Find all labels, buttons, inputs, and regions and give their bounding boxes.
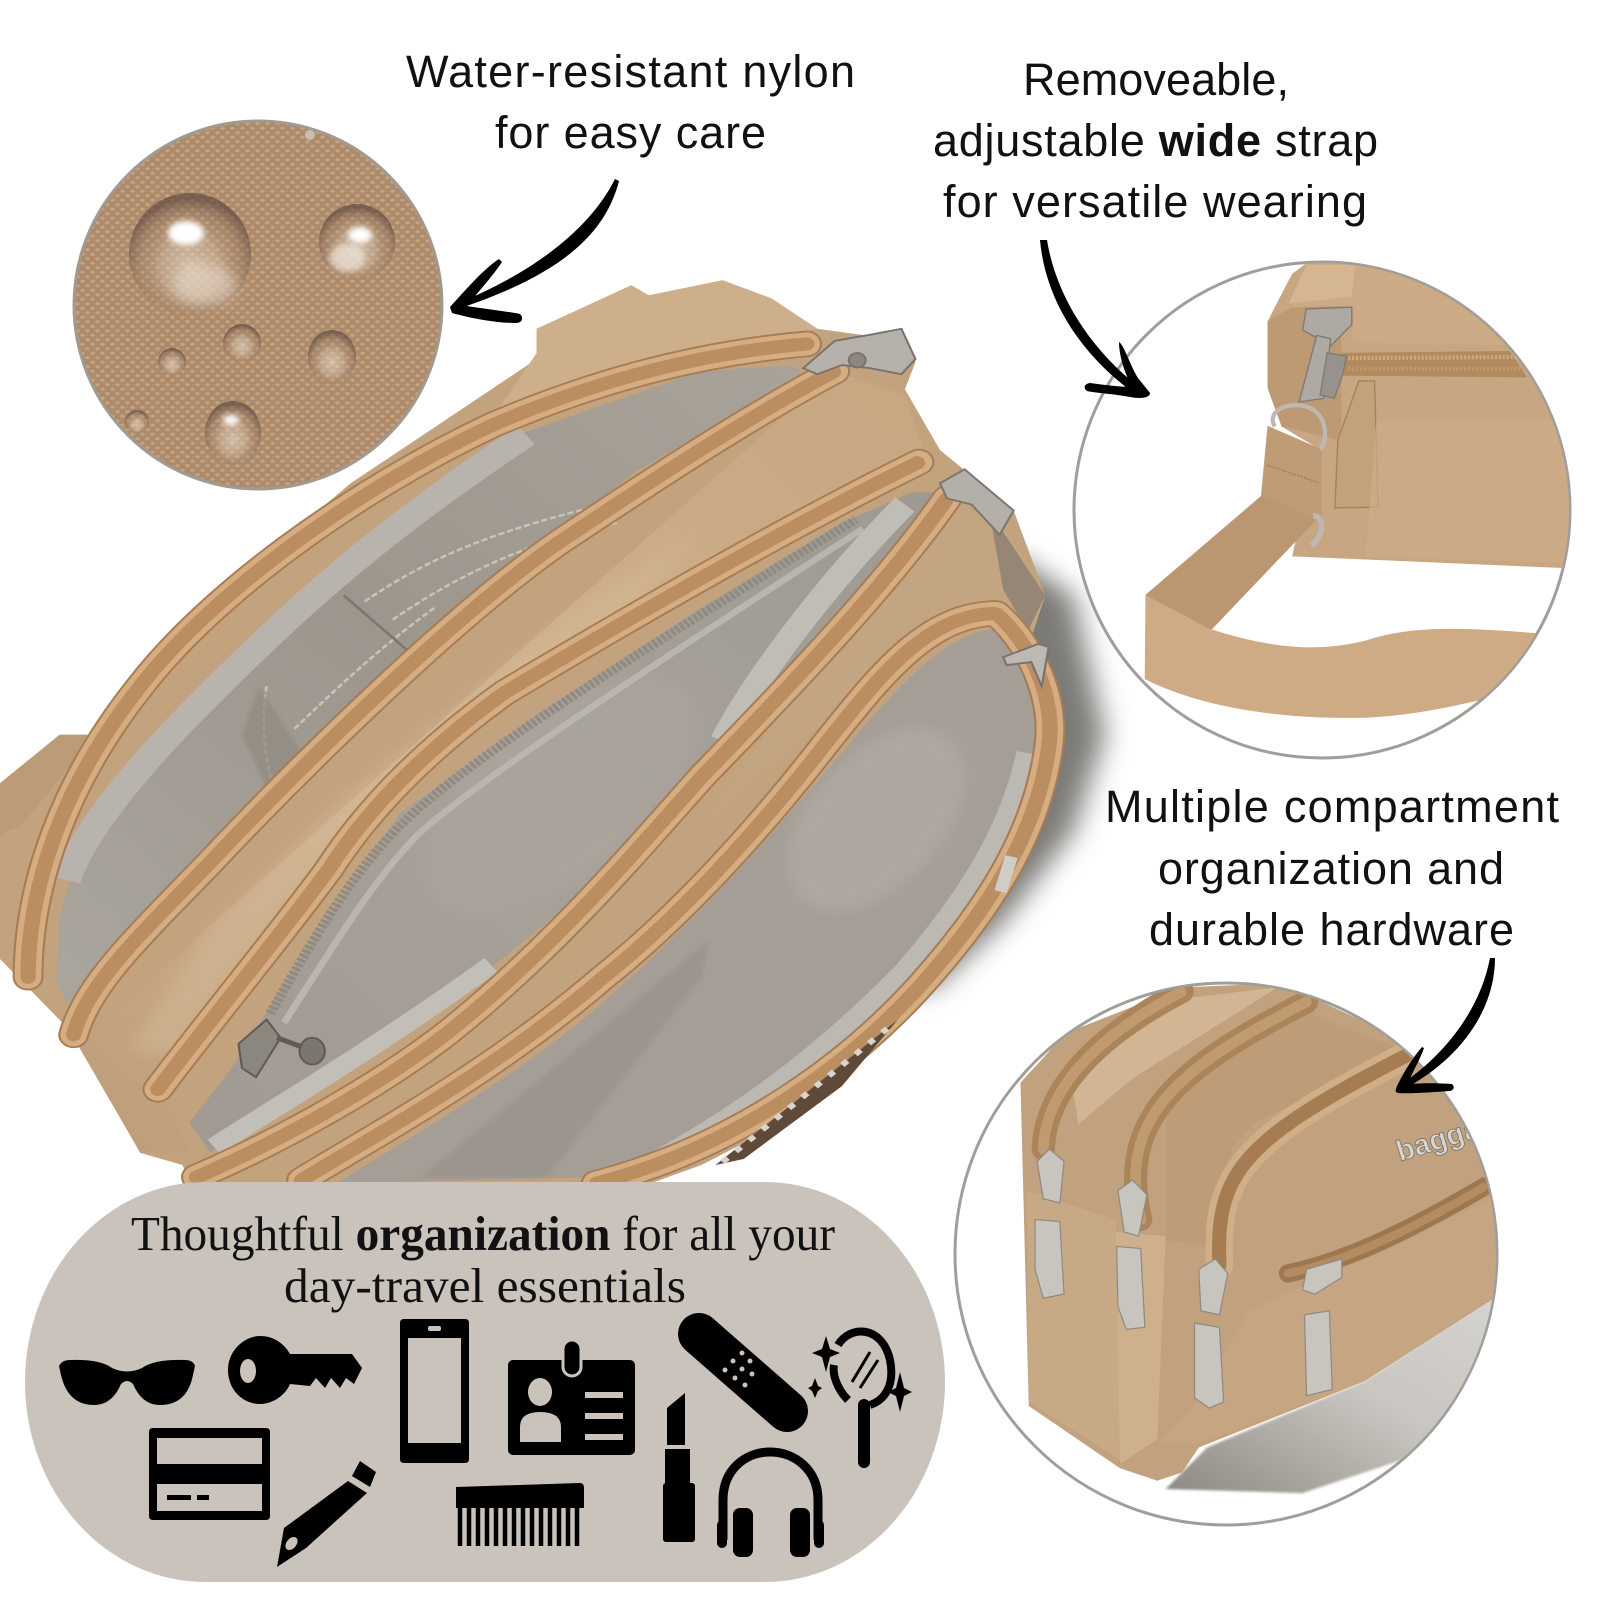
zipper pulls	[1035, 1149, 1342, 1408]
front interior fold	[421, 941, 709, 1177]
serif heading: Thoughtful organization for all your	[131, 1206, 835, 1261]
middle compartment interior	[189, 492, 940, 1153]
slider ring	[1311, 516, 1322, 546]
top strap tab	[491, 280, 817, 420]
fabric weave disc	[74, 121, 442, 489]
bag side	[1268, 263, 1576, 569]
lower zipper pull	[239, 1020, 325, 1077]
middle tan panel	[77, 371, 926, 1153]
middle interior grain highlight	[378, 637, 745, 954]
circle background	[1074, 262, 1570, 758]
arrow: to fabric closeup	[450, 179, 619, 323]
icon: lipstick	[663, 1393, 695, 1542]
icon: headphones	[717, 1452, 824, 1557]
text block: water-resistant nylon: Water-resistant nylon	[406, 46, 855, 97]
strap descending	[1145, 495, 1317, 634]
outer zipper	[28, 344, 807, 977]
circle background	[955, 983, 1497, 1525]
text block: compartments	[1105, 781, 1559, 955]
logo hardware	[716, 1020, 898, 1165]
text block: removable strap	[933, 54, 1378, 227]
front interior brights	[751, 700, 1003, 939]
icon: sunglasses	[59, 1360, 195, 1405]
bag cast shadow	[884, 553, 1105, 995]
pill background	[25, 1182, 945, 1582]
tan sliver panel	[702, 492, 1045, 826]
logo: bagga	[1393, 1112, 1484, 1168]
text block: compartments: Multiple compartment	[1105, 781, 1559, 832]
main photo: open bag	[0, 280, 1105, 1195]
pocket tab	[1335, 381, 1378, 508]
ground shadow	[1166, 1294, 1497, 1493]
small silver tag	[994, 855, 1017, 893]
bag body silhouette	[0, 280, 1052, 1195]
arrow: to strap closeup	[1040, 240, 1150, 398]
inner zip line	[270, 520, 856, 1014]
front compartment interior	[337, 629, 1035, 1183]
icon: phone	[400, 1319, 469, 1463]
zipper band	[1341, 351, 1527, 377]
text block: removable strap: adjustable wide strap	[933, 115, 1378, 166]
lighter main panel	[1366, 419, 1576, 563]
icon: pencil	[277, 1461, 376, 1567]
text block: removable strap: for versatile wearing	[943, 176, 1367, 227]
serif heading: day-travel essentials	[284, 1258, 686, 1313]
front webbing	[631, 753, 1028, 1174]
strap long	[1145, 595, 1541, 718]
text block: water-resistant nylon: for easy care	[495, 107, 766, 158]
panel: compartments closeup	[955, 983, 1501, 1525]
zipper two	[74, 371, 835, 1035]
middle webbing lower	[214, 965, 491, 1147]
back compartment interior	[56, 365, 803, 1007]
zipper pull front	[1003, 644, 1049, 686]
zipper five	[302, 614, 1050, 1183]
text block: compartments: durable hardware	[1149, 904, 1514, 955]
top panel light	[1070, 987, 1278, 1124]
left strap tab	[0, 735, 91, 835]
icon: id badge	[508, 1340, 635, 1455]
zipper pull top	[803, 329, 915, 374]
zipper three	[158, 462, 919, 1089]
icon: credit card	[149, 1428, 270, 1520]
text block: removable strap: Removeable,	[1023, 54, 1289, 105]
clasp metal	[1299, 307, 1352, 402]
icon: comb	[456, 1483, 584, 1546]
icon: hand mirror	[808, 1331, 912, 1462]
bag scene	[1020, 983, 1501, 1493]
pill panel: organization	[25, 1182, 945, 1582]
zippers	[1043, 991, 1485, 1273]
panel: water-resistant fabric closeup	[74, 121, 442, 489]
arrow: to compartments closeup	[1396, 958, 1495, 1093]
bag body	[1020, 983, 1501, 1481]
end panel light	[1028, 1399, 1029, 1402]
zipper pull middle	[940, 469, 1014, 535]
bag side shadow	[1268, 304, 1341, 441]
back compartment webbing	[67, 435, 526, 880]
text block: water-resistant nylon	[406, 46, 855, 158]
panel: removable strap closeup	[1074, 262, 1576, 758]
water droplets	[125, 130, 395, 465]
lower pocket	[1358, 1201, 1496, 1384]
middle webbing right	[723, 504, 905, 741]
icon: bandage	[699, 1334, 787, 1411]
icon: key	[228, 1336, 362, 1404]
back compartment creases	[264, 486, 631, 789]
panel highlight	[126, 529, 701, 1056]
text block: compartments: organization and	[1158, 843, 1504, 894]
D ring	[1273, 405, 1325, 449]
zipper four	[196, 498, 947, 1177]
strap loop	[1261, 426, 1322, 521]
serif heading	[131, 1206, 835, 1313]
strap scene	[1145, 263, 1576, 718]
